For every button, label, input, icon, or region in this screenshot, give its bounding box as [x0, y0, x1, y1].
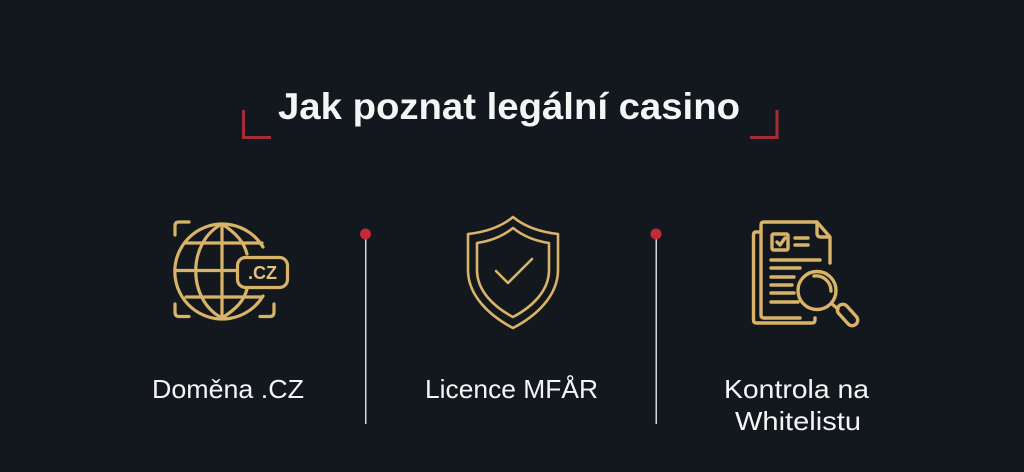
label: Licence MFÅR: Licence MFÅR	[425, 374, 598, 404]
label: Kontrola na Whitelistu: Whitelistu	[735, 406, 861, 436]
title bracket: right	[750, 110, 777, 138]
label: Kontrola na Whitelistu	[724, 374, 870, 436]
icon: document with magnifier	[754, 222, 860, 328]
label: Doměna .CZ: Doměna .CZ	[152, 374, 304, 404]
title: Jak poznat legální casino	[278, 86, 740, 127]
title bracket: left	[244, 110, 271, 138]
label: Kontrola na Whitelistu: Kontrola na	[724, 374, 870, 404]
divider: left	[360, 228, 371, 424]
icon: shield with check	[468, 217, 558, 328]
divider: right	[650, 228, 662, 424]
badge label: .CZ	[248, 263, 277, 283]
icon: globe with .cz badge	[175, 222, 288, 319]
